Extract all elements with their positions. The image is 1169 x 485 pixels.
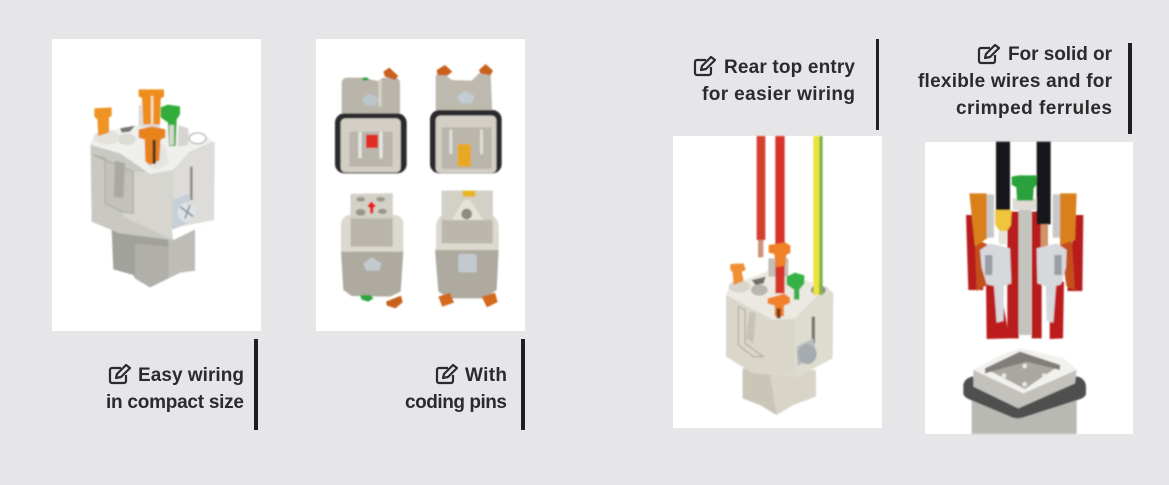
- view top right: [436, 73, 492, 115]
- illustration: cross section with wires and ferrule: [963, 142, 1086, 434]
- left contact: [980, 243, 1011, 323]
- orange lever left: [730, 263, 746, 285]
- orange lever left: [94, 107, 112, 136]
- text: for easier wiring: for easier wiring: [702, 84, 855, 105]
- green cap: [1012, 175, 1037, 201]
- view bottom right: [436, 215, 499, 250]
- icon: pencil on square: [979, 45, 999, 63]
- illustration: four connector views with coding pins: [335, 64, 502, 308]
- panel: coding pins photo: [316, 39, 525, 331]
- divider bar: [254, 339, 258, 430]
- caption: rear top entry: [695, 39, 879, 130]
- illustration: connector with red and yellow-green wires: [726, 136, 833, 415]
- ferrule: [995, 210, 1012, 231]
- view bottom left: [341, 215, 403, 252]
- orange lever rear: [139, 89, 164, 124]
- icon: pencil on square: [437, 365, 457, 383]
- caption: coding pins: [405, 339, 525, 430]
- panel: easy wiring connector photo: [52, 39, 261, 331]
- text: coding pins: coding pins: [405, 392, 507, 413]
- wire: red inserted: [775, 136, 785, 293]
- text: flexible wires and for: flexible wires and for: [918, 71, 1113, 92]
- orange lever front: [139, 126, 165, 165]
- text: crimped ferrules: crimped ferrules: [956, 98, 1112, 119]
- wire: red stripped: [757, 136, 765, 240]
- icon: pencil on square: [695, 57, 715, 75]
- orange lever rear: [769, 242, 790, 267]
- wire: yellow green: [813, 136, 819, 295]
- orange lever front: [768, 294, 790, 316]
- text: rear top entry: Rear top entry: [724, 57, 855, 78]
- text: in compact size: in compact size: [106, 392, 244, 413]
- icon: pencil on square: [110, 365, 130, 383]
- caption: easy wiring: [106, 339, 258, 430]
- center pin: [1019, 210, 1031, 335]
- lower insert: [972, 392, 1077, 434]
- caption: solid or flexible wires: [918, 43, 1132, 134]
- panel: cross section photo: [925, 142, 1133, 434]
- text: for solid or: For solid or: [1008, 44, 1113, 65]
- text: with: With: [465, 365, 507, 386]
- green lever: [787, 273, 804, 300]
- text: easy wiring: Easy wiring: [138, 365, 244, 386]
- divider bar: [876, 39, 879, 130]
- view top left: [342, 78, 400, 117]
- panel: rear top entry photo: [673, 136, 882, 428]
- screw: [172, 193, 189, 230]
- red housing: [966, 215, 1083, 291]
- divider bar: [1128, 43, 1132, 134]
- right contact: [1037, 243, 1067, 323]
- copper strands: [1041, 224, 1048, 248]
- black wires: [996, 142, 1010, 210]
- green lever: [161, 105, 180, 146]
- divider bar: [521, 339, 525, 430]
- illustration: connector with orange and green levers: [91, 89, 215, 287]
- orange levers: [969, 193, 992, 247]
